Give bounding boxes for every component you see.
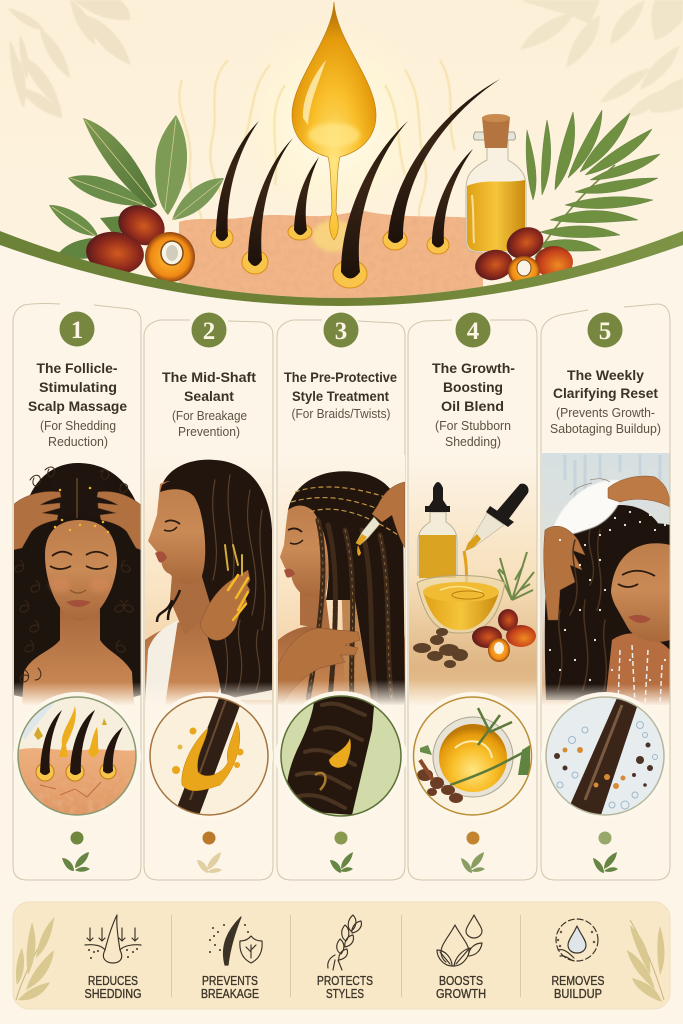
label: REMOVES [552, 974, 604, 988]
card background [408, 319, 537, 880]
icon: hair and shield [210, 917, 262, 965]
portrait: woman applying dropper to braids [278, 455, 405, 706]
panel: step 1 scalp massage [13, 304, 141, 880]
illustration: oil bottles and bowl [409, 477, 536, 704]
oil drop [292, 2, 376, 240]
portrait: woman sealing hair with oil [145, 455, 273, 706]
status dot [598, 832, 612, 844]
dividers [172, 915, 520, 997]
label: REDUCES [88, 974, 138, 988]
oil drop stream glow on scalp [312, 220, 356, 252]
aura wavy lines [179, 60, 455, 220]
portrait: woman massaging scalp [13, 463, 141, 706]
card background [277, 319, 405, 880]
large left leaves [49, 115, 224, 259]
panel: step 5 weekly clarifying reset [541, 304, 670, 880]
panel: step 1 scalp massage: Scalp Massage [28, 398, 127, 414]
benefit: protects styles: STYLES [326, 987, 364, 1001]
faded foliage top right [520, 0, 683, 118]
label: PROTECTS [317, 974, 373, 988]
icon: clean droplet in dashed ring [556, 919, 598, 961]
benefit: prevents breakage: BREAKAGE [201, 987, 259, 1001]
inset: oiled braid [276, 690, 406, 821]
curved green band [0, 231, 683, 306]
number badge [192, 312, 226, 348]
label: BOOSTS [439, 974, 483, 988]
card background [13, 304, 141, 880]
status dot [334, 832, 348, 844]
icon: leaf sprig [593, 852, 618, 873]
panel: step 4 growth-boosting oil blend [408, 312, 537, 880]
panel: step 2 mid-shaft sealant [144, 312, 273, 880]
panel: step 2 mid-shaft sealant: Prevention) [178, 424, 240, 439]
hair strands [216, 79, 500, 278]
panel: step 1 scalp massage: Stimulating [39, 379, 117, 395]
number badge [456, 312, 490, 348]
bar background [13, 902, 670, 1009]
panel: benefits bar [13, 902, 670, 1009]
palm frond [526, 110, 660, 258]
heading: The Weekly [567, 367, 644, 383]
glow behind oil drop [219, 10, 449, 240]
number badge [324, 312, 358, 348]
subtitle: (Prevents Growth- [556, 405, 655, 420]
panel: step 5 weekly clarifying reset: Sabotaging Buildup) [550, 421, 661, 436]
inset: oil bowl with rosemary [408, 692, 536, 820]
panel: step 4 growth-boosting oil blend: Oil Blend [441, 398, 504, 414]
scalp cross-section [179, 210, 483, 300]
icon: leaf sprig [330, 852, 353, 873]
icon: leaf sprig [62, 852, 90, 872]
panel: step 3 pre-protective style treatment: Style Treatment [292, 388, 389, 404]
number badge [588, 312, 622, 348]
number badge: 1 [71, 317, 83, 344]
card background [541, 304, 670, 880]
subtitle: (For Braids/Twists) [292, 406, 390, 421]
number badge [60, 312, 94, 346]
heading: The Pre-Protective [284, 369, 397, 385]
portrait: woman rinsing hair [542, 453, 670, 706]
icon: droplets and leaves [437, 915, 482, 966]
benefit: boosts growth: GROWTH [436, 987, 486, 1001]
benefit: removes buildup [552, 919, 604, 1001]
panel: step 3 pre-protective style treatment [276, 312, 406, 880]
benefit: reduces shedding [84, 915, 142, 1001]
icon: leaf sprig [197, 852, 222, 873]
benefit: prevents breakage [201, 917, 262, 1001]
inset: sealed hair shaft [145, 690, 273, 820]
benefit: boosts growth [436, 915, 486, 1001]
heading: The Follicle- [36, 360, 118, 376]
oil bottle [466, 114, 526, 252]
panel: step 4 growth-boosting oil blend: Boosting [443, 379, 503, 395]
inset: follicles and scalp [13, 692, 141, 820]
subtitle: (For Shedding [40, 418, 116, 433]
panel: step 2 mid-shaft sealant: Sealant [184, 388, 234, 404]
number badge: 2 [203, 318, 215, 345]
status dot [70, 832, 84, 844]
hero illustration [0, 0, 683, 306]
icon: hair follicle with arrows [85, 915, 141, 963]
number badge: 4 [467, 318, 480, 345]
subtitle: (For Breakage [172, 408, 247, 423]
panel: step 5 weekly clarifying reset: Clarifying Reset [553, 385, 658, 401]
faded foliage top left [8, 0, 131, 118]
panel: step 4 growth-boosting oil blend: Shedding) [445, 434, 501, 449]
left palm fruits [83, 198, 195, 282]
number badge: 3 [335, 318, 347, 345]
status dot [466, 832, 480, 844]
follicle bulbs [211, 224, 449, 288]
heading: The Mid-Shaft [162, 369, 256, 385]
inset: clarified hair shaft [541, 692, 669, 820]
benefit: protects styles [317, 915, 373, 1001]
card background [144, 319, 273, 880]
heading: The Growth- [432, 360, 515, 376]
status dot [202, 832, 216, 844]
icon: left olive sprig [16, 918, 54, 1000]
icon: leaf sprig [461, 852, 485, 873]
panel: step 1 scalp massage: Reduction) [48, 434, 108, 449]
number badge: 5 [599, 318, 611, 345]
hero background [0, 0, 683, 300]
icon: right olive sprig [627, 920, 664, 1002]
benefit: removes buildup: BUILDUP [554, 987, 602, 1001]
right palm fruits [472, 221, 573, 286]
icon: braid [328, 915, 361, 970]
label: PREVENTS [202, 974, 258, 988]
benefit: reduces shedding: SHEDDING [84, 987, 142, 1001]
subtitle: (For Stubborn [435, 418, 511, 433]
